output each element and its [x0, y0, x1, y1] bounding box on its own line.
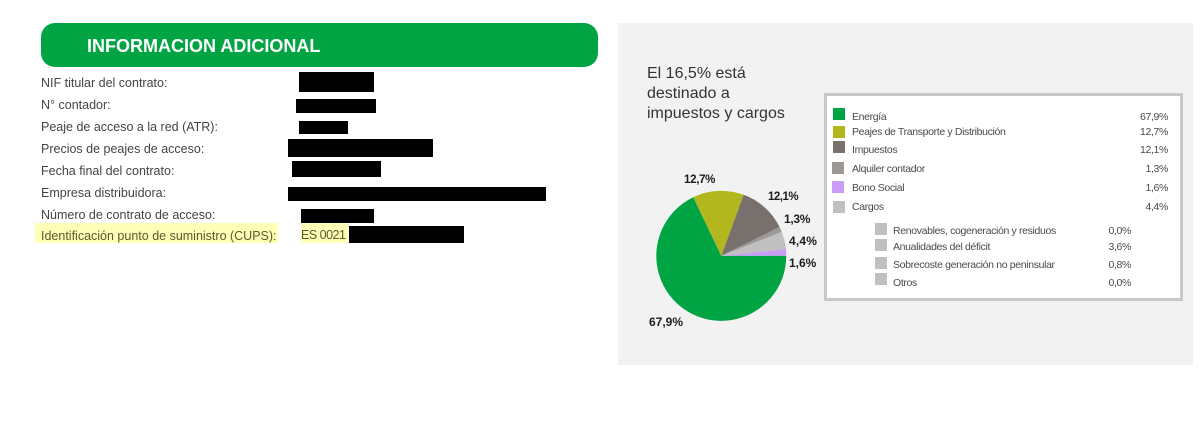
highlight: CUPS value: [301, 223, 348, 243]
legend swatch: energia: [833, 108, 845, 120]
pie label: 1,3%: 1,3%: [784, 212, 810, 226]
legend label: energia: Energía: [852, 111, 886, 123]
heading: impuestos y cargos: El 16,5% está: [647, 65, 746, 82]
legend value: renovables: 0,0%: [1108, 225, 1131, 237]
label: numero de contrato: Número de contrato de acceso:: [41, 208, 215, 222]
legend swatch: sobrecoste: [875, 257, 887, 269]
redaction: empresa: [288, 187, 546, 201]
panel: additional information: [35, 23, 598, 243]
highlighted row: CUPS: [35, 223, 464, 243]
legend swatch: otros: [875, 273, 887, 285]
legend label: alquiler: Alquiler contador: [852, 163, 925, 175]
label: contador: N° contador:: [41, 98, 111, 112]
highlight: CUPS label: [35, 223, 278, 243]
legend swatch: impuestos: [833, 141, 845, 153]
slice: energia: [656, 197, 786, 321]
legend value: peajes: 12,7%: [1140, 126, 1168, 138]
legend swatch: alquiler: [832, 162, 844, 174]
heading: impuestos y cargos: destinado a: [647, 85, 730, 102]
legend: [824, 93, 1183, 301]
label: precios: Precios de peajes de acceso:: [41, 142, 204, 156]
slice: alquiler: [721, 227, 782, 256]
legend swatch: renovables: [875, 223, 887, 235]
redaction: NIF: [299, 72, 374, 92]
redaction: precios: [288, 139, 433, 157]
legend swatch: peajes: [833, 126, 845, 138]
legend label: impuestos: Impuestos: [852, 144, 897, 156]
legend label: sobrecoste: Sobrecoste generación no peninsular: [893, 259, 1055, 271]
redaction: fecha: [292, 161, 381, 177]
legend value: bono social: 1,6%: [1145, 182, 1168, 194]
heading: impuestos y cargos: impuestos y cargos: [647, 105, 785, 122]
heading: informacion adicional: INFORMACION ADICIONAL: [87, 36, 320, 56]
legend value: energia: 67,9%: [1140, 111, 1168, 123]
heading: informacion adicional: [41, 23, 598, 67]
legend label: renovables: Renovables, cogeneración y residuos: [893, 225, 1056, 237]
redaction: CUPS: [349, 226, 464, 243]
redaction: contador: [296, 99, 376, 113]
legend value: cargos: 4,4%: [1145, 201, 1168, 213]
legend value: alquiler: 1,3%: [1145, 163, 1168, 175]
pie label: 4,4%: 4,4%: [789, 234, 817, 248]
legend value: impuestos: 12,1%: [1140, 144, 1168, 156]
legend value: otros: 0,0%: [1108, 277, 1131, 289]
label: NIF: NIF titular del contrato:: [41, 76, 167, 90]
slice: cargos: [721, 232, 786, 256]
redaction: peaje: [299, 121, 348, 134]
legend swatch: cargos: [833, 201, 845, 213]
slice: impuestos: [721, 195, 780, 256]
legend label: anualidades: Anualidades del déficit: [893, 241, 990, 253]
slice: peajes: [693, 191, 744, 256]
pie label: 12,1%: 12,1%: [768, 191, 798, 203]
legend label: bono social: Bono Social: [852, 182, 904, 194]
pie label: 67,9%: 67,9%: [649, 315, 683, 329]
label: empresa: Empresa distribuidora:: [41, 186, 166, 200]
panel: cost breakdown: [618, 23, 1193, 365]
label: CUPS: Identificación punto de suministro (CUPS):: [41, 229, 277, 243]
legend value: anualidades: 3,6%: [1108, 241, 1131, 253]
legend swatch: bono social: [832, 181, 844, 193]
label: peaje: Peaje de acceso a la red (ATR):: [41, 120, 218, 134]
value: CUPS: ES 0021: [301, 228, 345, 242]
slice: bono social: [721, 249, 786, 256]
legend value: sobrecoste: 0,8%: [1108, 259, 1131, 271]
redaction: numero de contrato: [301, 209, 374, 223]
legend label: cargos: Cargos: [852, 201, 884, 213]
pie chart: [656, 190, 786, 321]
label: fecha: Fecha final del contrato:: [41, 164, 174, 178]
pie label: 1,6%: 1,6%: [789, 256, 816, 270]
legend label: peajes: Peajes de Transporte y Distribución: [852, 126, 1006, 138]
pie label: 12,7%: 12,7%: [684, 174, 715, 186]
heading: impuestos y cargos: [647, 65, 785, 122]
legend swatch: anualidades: [875, 239, 887, 251]
legend label: otros: Otros: [893, 277, 917, 289]
